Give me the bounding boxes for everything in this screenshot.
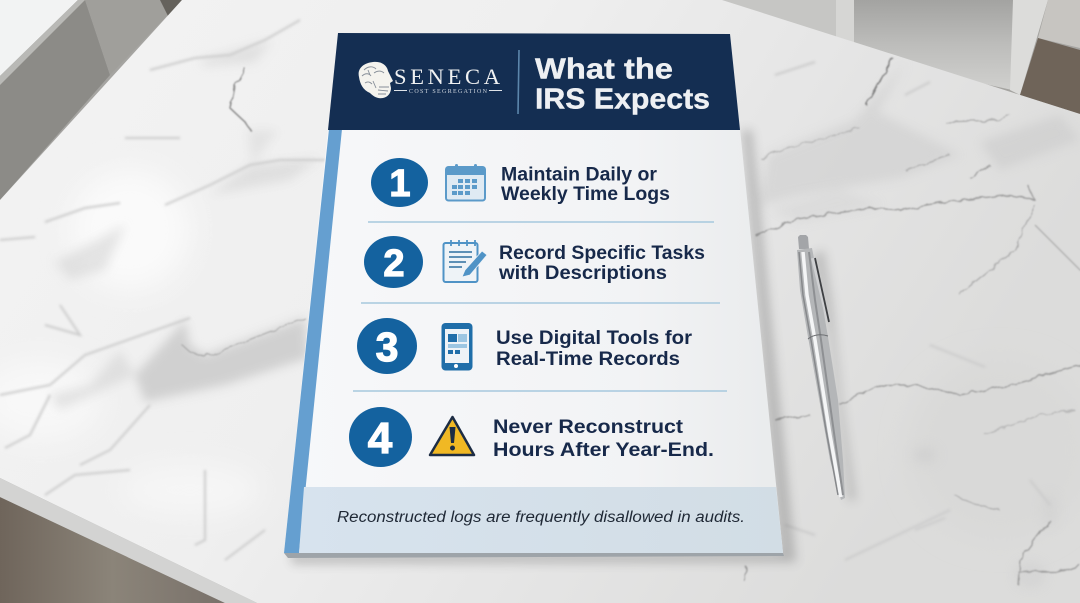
icon: warning triangle [430, 417, 474, 455]
step 4 text: Never Reconstruct [493, 417, 684, 438]
heading: IRS Expects [535, 84, 710, 116]
step 1 text: Maintain Daily or [501, 164, 658, 186]
step 4 text: Hours After Year-End. [493, 440, 714, 461]
step 1 text [501, 164, 670, 205]
poster body [284, 129, 783, 553]
step 2 [364, 236, 705, 288]
icon: notepad and pencil [444, 240, 487, 282]
sharp dark veins [182, 58, 1080, 585]
number badge 4: 4 [368, 414, 393, 463]
icon: smartphone [442, 323, 472, 370]
step 4 [349, 407, 714, 467]
poster [284, 33, 784, 558]
poster page edge [284, 553, 784, 558]
step 3 text: Use Digital Tools for [496, 328, 693, 349]
broad grey patches [52, 44, 1072, 409]
step 3 text: Real-Time Records [496, 349, 680, 370]
header divider [518, 50, 519, 114]
step 2 text: with Descriptions [498, 263, 667, 284]
step 1 [371, 158, 670, 207]
number badge 3 [357, 318, 417, 374]
number badge 2: 2 [383, 243, 405, 285]
step 2 text [498, 243, 705, 284]
header band [328, 33, 740, 130]
logo: Seneca [359, 62, 502, 98]
left accent strip [284, 129, 342, 553]
icon: philosopher head [359, 62, 393, 98]
step 3 text [496, 328, 693, 370]
step 2 text: Record Specific Tasks [499, 243, 705, 264]
poster shadow [290, 130, 796, 564]
number badge 3: 3 [376, 324, 398, 370]
icon: calendar [446, 164, 485, 200]
number badge 4 [349, 407, 412, 467]
pen [797, 235, 856, 500]
footer band [299, 487, 783, 553]
heading [535, 54, 710, 116]
wordmark: SENECA [394, 64, 501, 89]
step 3 [357, 318, 693, 374]
step 1 text: Weekly Time Logs [501, 184, 670, 205]
number badge 1 [371, 158, 428, 207]
footer note: Reconstructed logs are frequently disallowed in audits. [337, 509, 745, 526]
number badge 2 [364, 236, 423, 288]
heading: What the [535, 54, 673, 86]
tagline: COST SEGREGATION [409, 89, 488, 95]
number badge 1: 1 [389, 163, 411, 205]
pen clip [813, 258, 829, 322]
step 4 text [493, 417, 714, 461]
